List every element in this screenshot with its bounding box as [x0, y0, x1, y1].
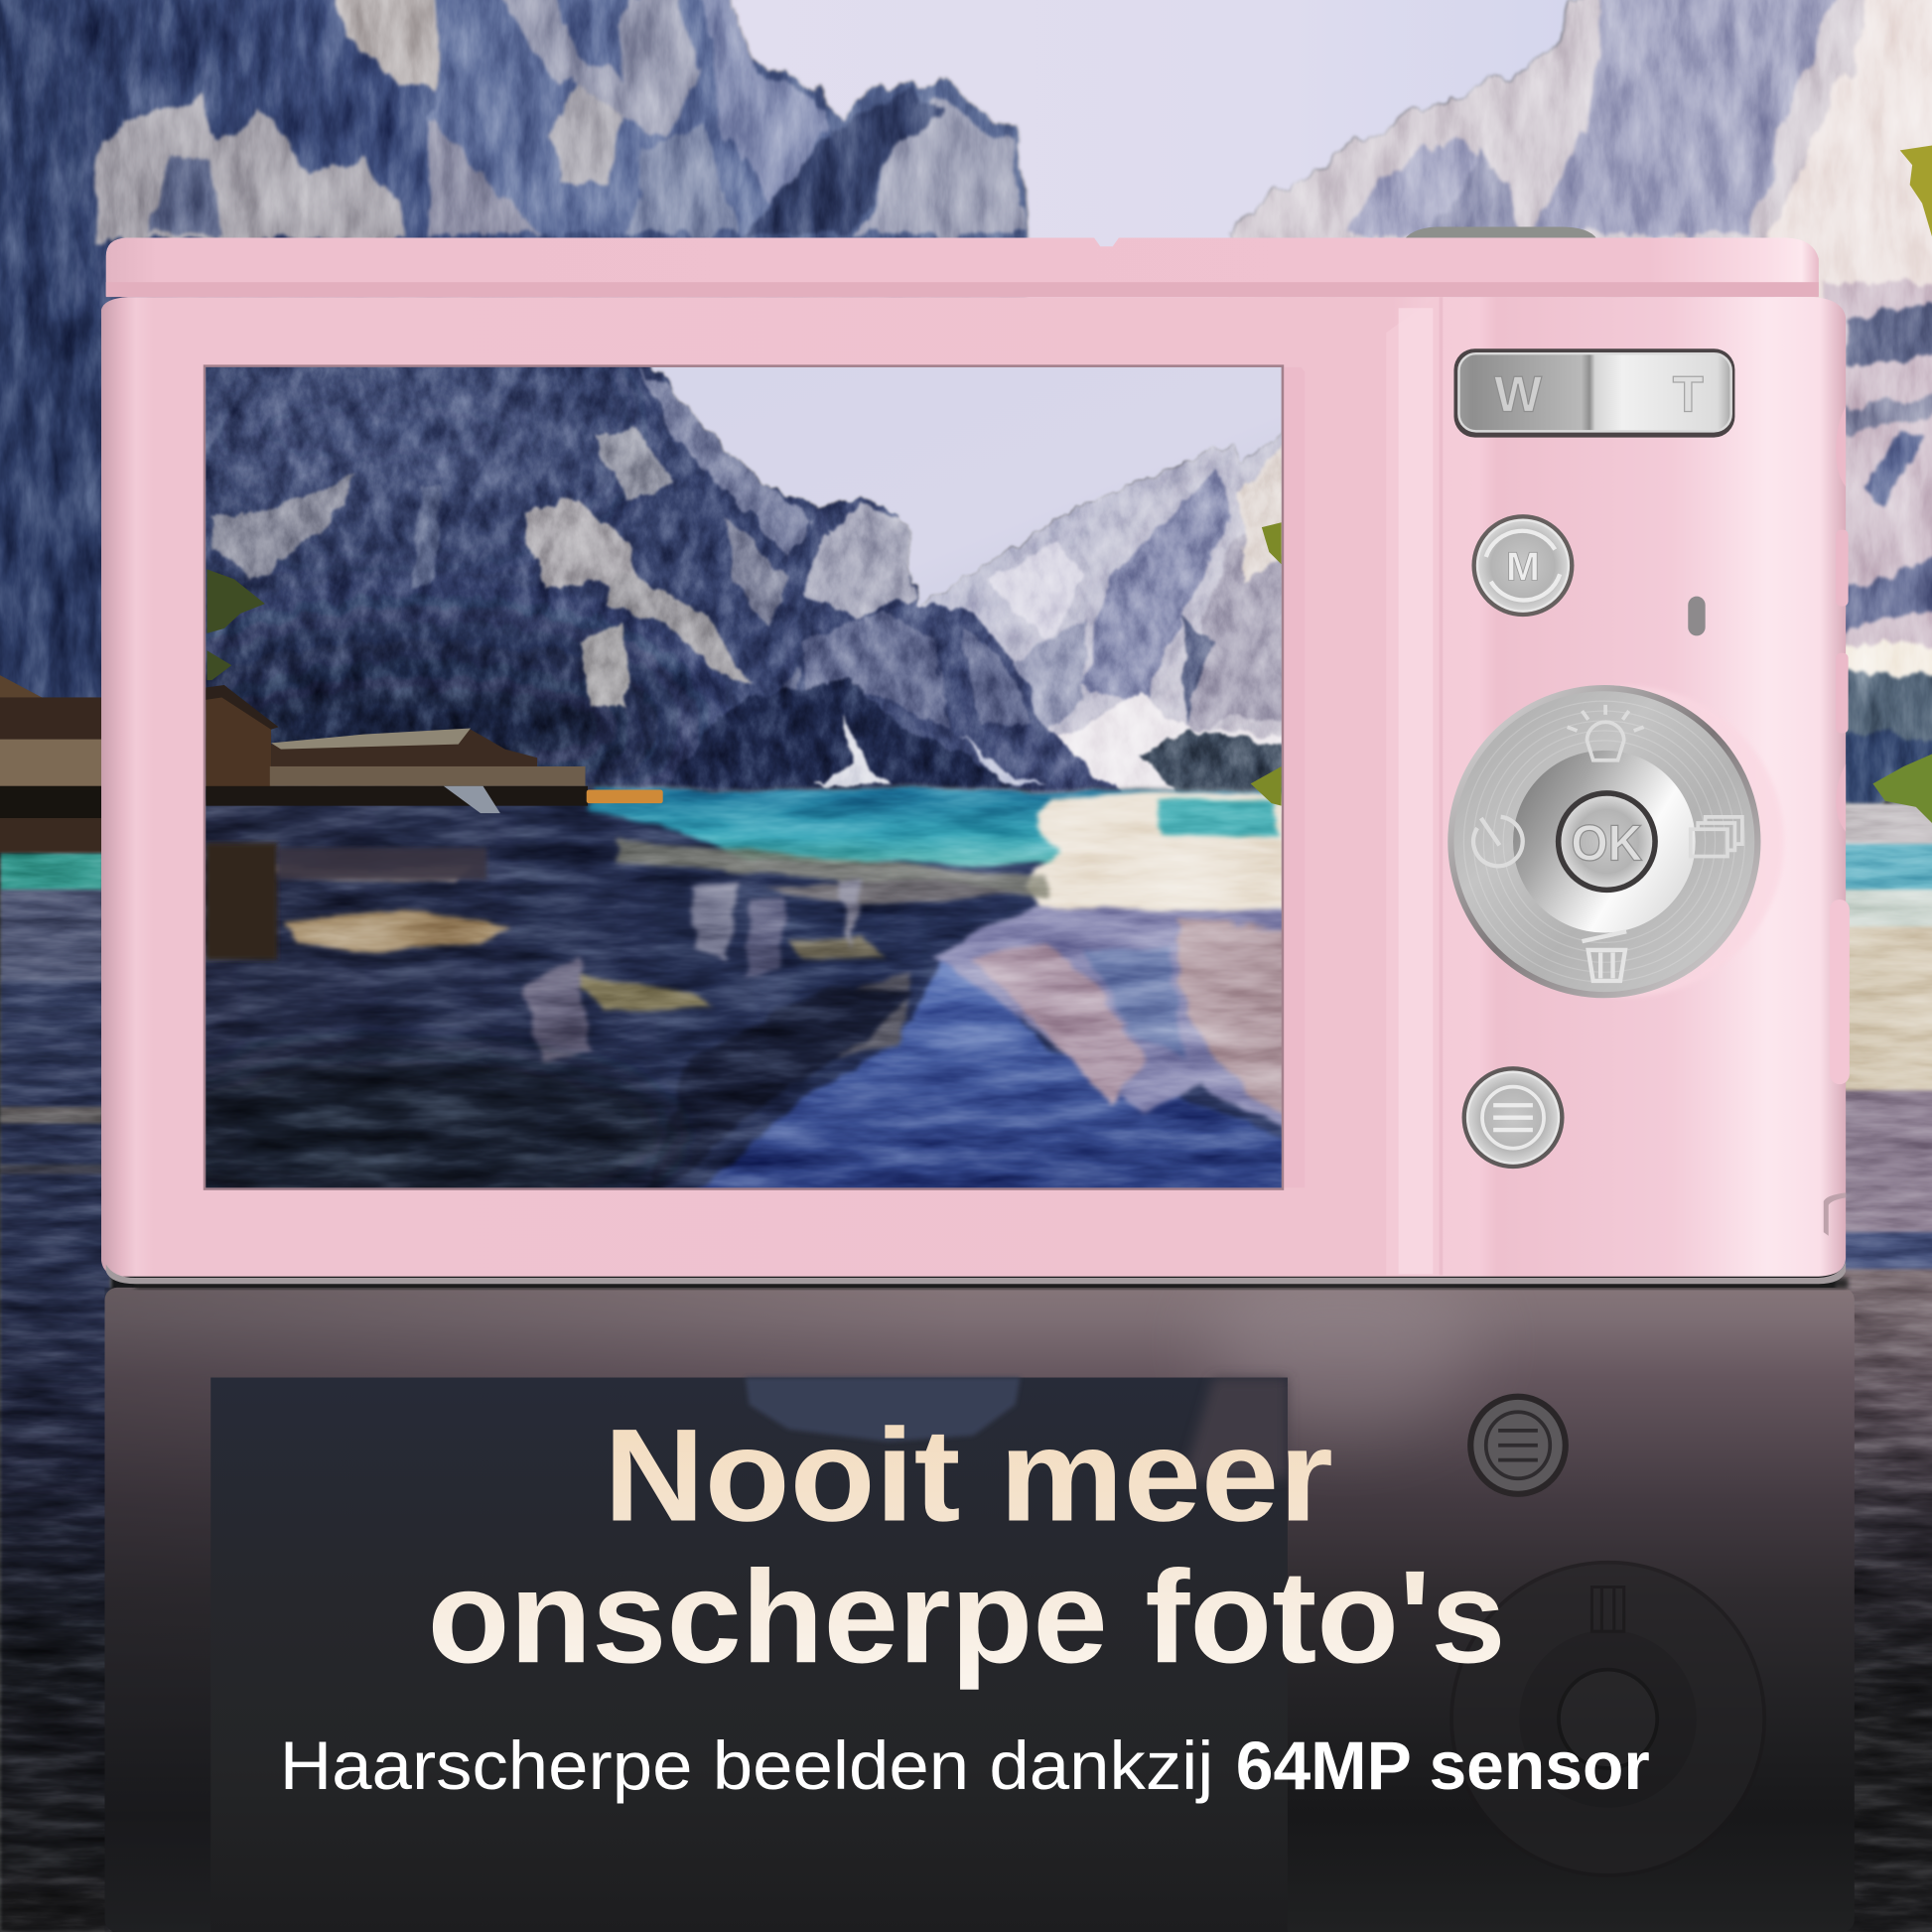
reflected menu button: [1467, 1394, 1569, 1497]
mountain rock faces: [211, 367, 1035, 752]
screen lake layer: [136, 788, 1318, 1220]
upper haze: [207, 367, 567, 509]
far right mountain: [921, 416, 1307, 813]
screen recess: [1282, 367, 1305, 1187]
top band groove: [106, 282, 1819, 297]
dial halo: [1473, 686, 1784, 997]
lower left ground: [136, 1047, 678, 1220]
top dial edge: [1405, 226, 1596, 239]
pink mountain reflection: [934, 905, 1307, 1146]
boathouse: [0, 697, 103, 821]
reflected dial: [1451, 1563, 1764, 1875]
turquoise lake band: [592, 788, 1307, 863]
water strips layer: [0, 803, 1932, 1932]
screen rock layer: [206, 367, 1282, 814]
camera contact shadow: [136, 1278, 1849, 1289]
icon: burst mode: [1691, 817, 1742, 857]
headline line two: onscherpe foto's: [428, 1544, 1506, 1691]
icon: trash: [1583, 931, 1626, 981]
icon: flash bulb: [1568, 705, 1644, 760]
forest: [1836, 665, 1932, 807]
dial brushed lines: [1463, 701, 1744, 982]
screen sky: [206, 367, 1282, 811]
snow patch: [1836, 637, 1932, 690]
sky: [617, 0, 1725, 321]
lower forest shade: [160, 640, 678, 813]
boats: [587, 790, 663, 803]
snow slope: [1056, 691, 1282, 791]
reflected screen: [210, 1378, 1288, 1932]
navigation dial: [1448, 685, 1784, 998]
reflected mountain in screen: [1182, 1378, 1288, 1478]
subheading emphasis: 64MP sensor: [1236, 1728, 1650, 1804]
headline: [428, 1402, 1506, 1691]
inner ring: [1513, 751, 1696, 932]
dark mountain reflection streaks: [523, 878, 911, 1207]
tree left: [207, 569, 265, 680]
M label: M: [1506, 544, 1540, 590]
bottom edge: [106, 1262, 1846, 1284]
snow streaks: [819, 715, 888, 786]
left side mountain base: [0, 234, 123, 727]
zoom rocker: [1453, 348, 1734, 438]
mode button: [1471, 514, 1574, 617]
boathouse left: [206, 685, 278, 788]
boathouse roof: [0, 675, 103, 715]
OK label: OK: [1571, 814, 1643, 871]
W label: W: [1494, 366, 1542, 423]
side buttons: [1824, 407, 1850, 1236]
background rock layer: [0, 0, 1932, 807]
dark water: [173, 788, 1318, 1207]
teal pool: [1159, 801, 1276, 835]
reflected mountain glow: [1207, 1257, 1478, 1430]
main lodge: [206, 728, 588, 813]
teal water left: [0, 853, 103, 890]
reflected camera body: [104, 1288, 1855, 1932]
foliage top right: [1900, 145, 1932, 236]
side bevel: [1386, 297, 1442, 1276]
subheading: [280, 1728, 1650, 1804]
left strip scenery: [0, 675, 103, 853]
right strip mountain: [1824, 283, 1932, 653]
right mountain: [1230, 0, 1932, 333]
bright lake reflection: [1023, 791, 1307, 918]
left side shade: [104, 1288, 967, 1932]
reflected sky in screen: [746, 1378, 1021, 1442]
menu button: [1462, 1066, 1565, 1169]
camera reflection and dark floor: [104, 1257, 1855, 1932]
boathouse railing: [0, 740, 103, 786]
T label: T: [1673, 366, 1704, 423]
tree branch right: [1872, 755, 1932, 823]
dark fade right: [1836, 1269, 1932, 1932]
deep blue mirror water: [678, 949, 1307, 1207]
camera: [101, 226, 1850, 1284]
camera screen photo: [206, 367, 1282, 1187]
indicator LED: [1688, 597, 1706, 635]
main dark mountain: [206, 367, 1122, 800]
left mountain: [0, 0, 1026, 321]
screen frame shadow: [204, 364, 1284, 1190]
camera body: [101, 297, 1846, 1277]
pale lake right: [1836, 803, 1932, 845]
icon: timer: [1473, 817, 1523, 866]
forest patch: [1140, 730, 1307, 801]
OK button: [1556, 790, 1658, 893]
subheading: Haarscherpe beelden dankzij: [280, 1728, 1213, 1804]
headline line one: Nooit meer: [604, 1402, 1333, 1549]
foliage right: [1251, 522, 1282, 806]
boathouse reflection: [206, 843, 277, 960]
sand shallows: [246, 840, 1047, 1008]
dark water left: [0, 981, 111, 1932]
dark forest base: [653, 678, 1035, 801]
camera top band: [106, 238, 1819, 296]
lake reflection right: [1836, 1090, 1932, 1238]
